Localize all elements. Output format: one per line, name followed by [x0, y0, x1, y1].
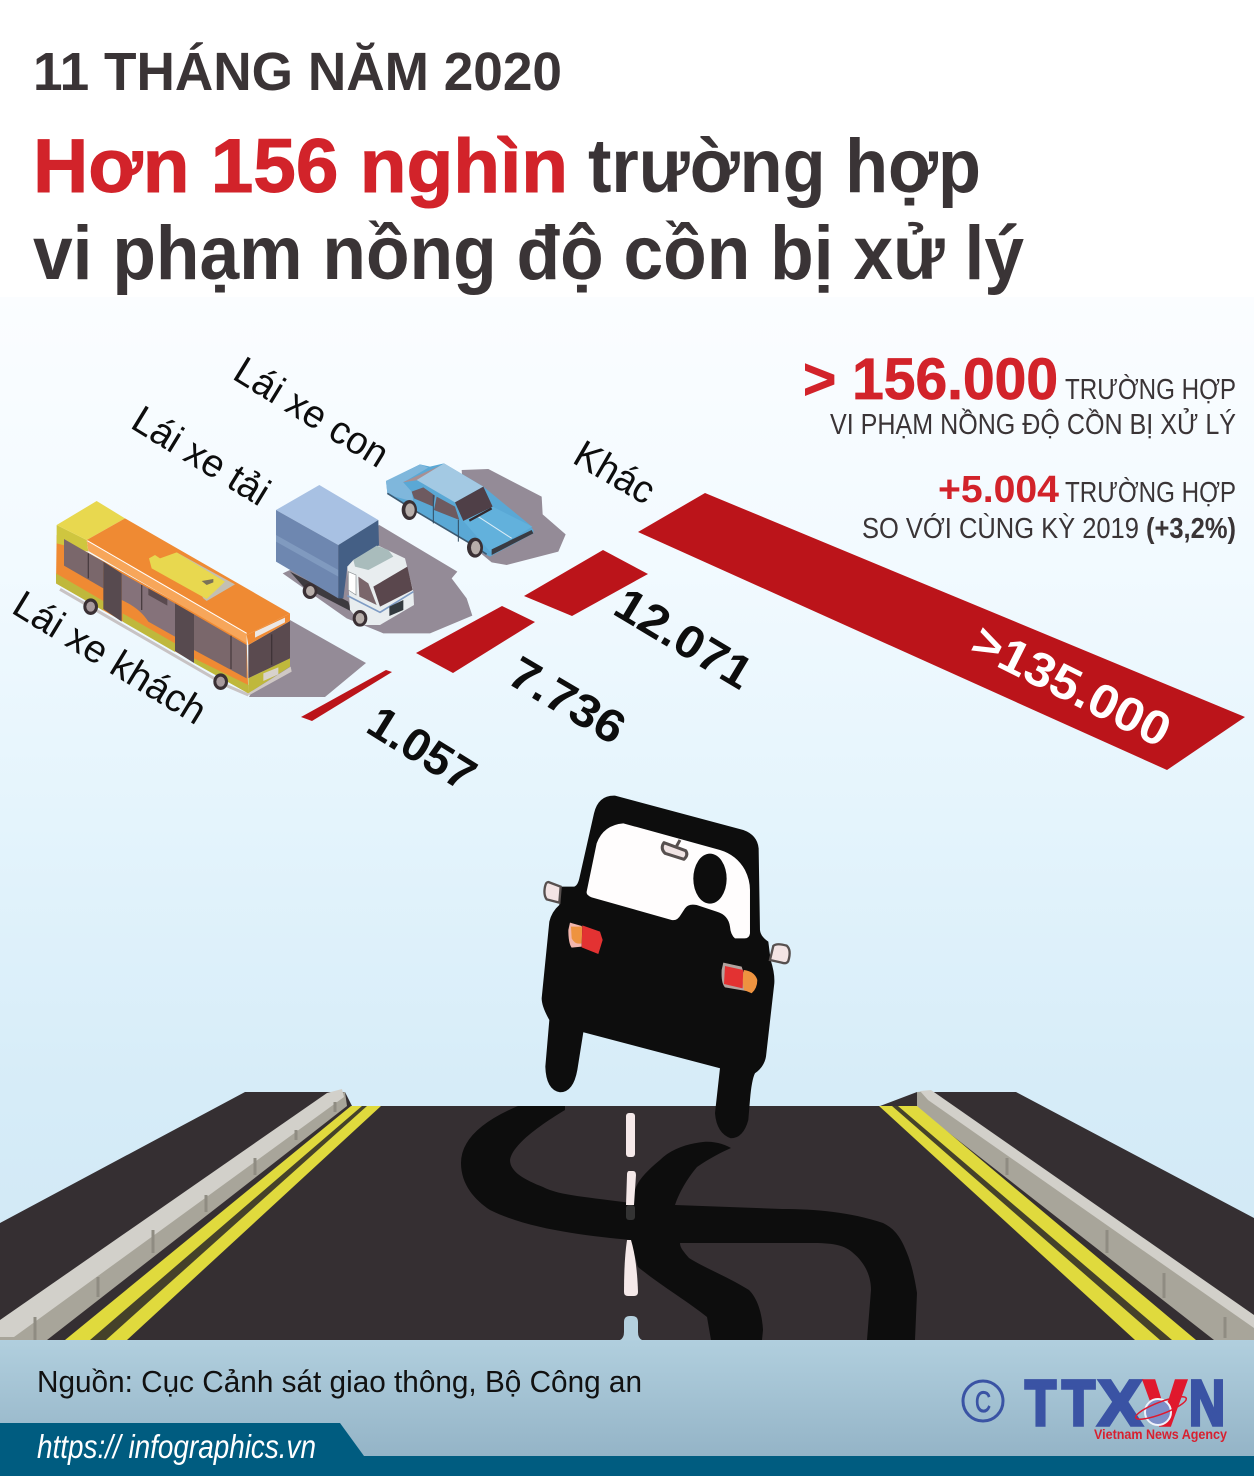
- increase figure: +5.004: [938, 469, 1059, 511]
- centre dashes: [620, 1113, 642, 1340]
- bar: bus drivers: [301, 670, 392, 721]
- headline red: Hơn 156 nghìn: [33, 124, 568, 209]
- TTXVN logo: [963, 1367, 1227, 1442]
- copyright mark: [963, 1381, 1003, 1421]
- left double yellow line: [65, 1106, 381, 1340]
- isometric bar chart: [5, 349, 1245, 801]
- label: other: Khác: [566, 433, 662, 513]
- windshield: [587, 823, 750, 938]
- headline dark first line: trường hợp: [588, 124, 981, 209]
- rear-view mirror: [662, 840, 687, 859]
- label: car: Lái xe con: [226, 349, 396, 476]
- website bar: [0, 1423, 1254, 1476]
- total figure: > 156.000: [803, 347, 1058, 412]
- wordmark: N: [1189, 1367, 1225, 1439]
- globe: [1134, 1393, 1188, 1425]
- car body: [542, 796, 774, 1138]
- left tail light: [568, 923, 603, 954]
- wordmark: T: [1025, 1367, 1056, 1439]
- right tail light: [722, 963, 757, 993]
- bar: car drivers: [524, 550, 648, 616]
- copyright mark: C: [975, 1386, 991, 1419]
- website url: https:// infographics.vn: [37, 1428, 316, 1465]
- value 12.071: 12.071: [606, 577, 762, 699]
- icon: bus: [56, 501, 366, 697]
- icon: truck: [276, 485, 472, 633]
- label: truck: Lái xe tải: [124, 398, 277, 515]
- left side mirror: [544, 882, 561, 903]
- driver head: [693, 854, 727, 904]
- wordmark: T: [1062, 1367, 1095, 1439]
- subtitle: 11 THÁNG NĂM 2020: [33, 42, 562, 102]
- right curb: [917, 1090, 1254, 1340]
- value 7.736: 7.736: [500, 646, 635, 754]
- value 1.057: 1.057: [359, 695, 486, 801]
- right side mirror: [770, 944, 790, 963]
- value 135.000: >135.000: [963, 614, 1179, 758]
- bar: other: [638, 493, 1245, 770]
- source text: Nguồn: Cục Cảnh sát giao thông, Bộ Công an: [37, 1364, 642, 1399]
- bar: truck drivers: [416, 606, 535, 673]
- wordmark: V: [1144, 1367, 1186, 1439]
- title block: [33, 42, 1024, 296]
- road: [0, 1089, 1254, 1340]
- icon: blue car: [386, 463, 566, 565]
- sky background: [0, 297, 1254, 1345]
- summary statistics: [803, 347, 1236, 545]
- agency name: Vietnam News Agency: [1094, 1426, 1227, 1442]
- wordmark: X: [1098, 1367, 1142, 1439]
- wordmark: [1025, 1367, 1225, 1439]
- headline second line: vi phạm nồng độ cồn bị xử lý: [33, 211, 1024, 296]
- asphalt: [0, 1092, 1254, 1340]
- right double yellow line: [879, 1106, 1196, 1340]
- skid marks: [461, 1106, 917, 1340]
- increase description: SO VỚI CÙNG KỲ 2019 (+3,2%): [862, 512, 1236, 545]
- left curb: [0, 1089, 347, 1340]
- label: bus: Lái xe khách: [5, 583, 214, 733]
- icon: drunk driver car: [542, 796, 790, 1138]
- footer panel: [0, 1340, 1254, 1456]
